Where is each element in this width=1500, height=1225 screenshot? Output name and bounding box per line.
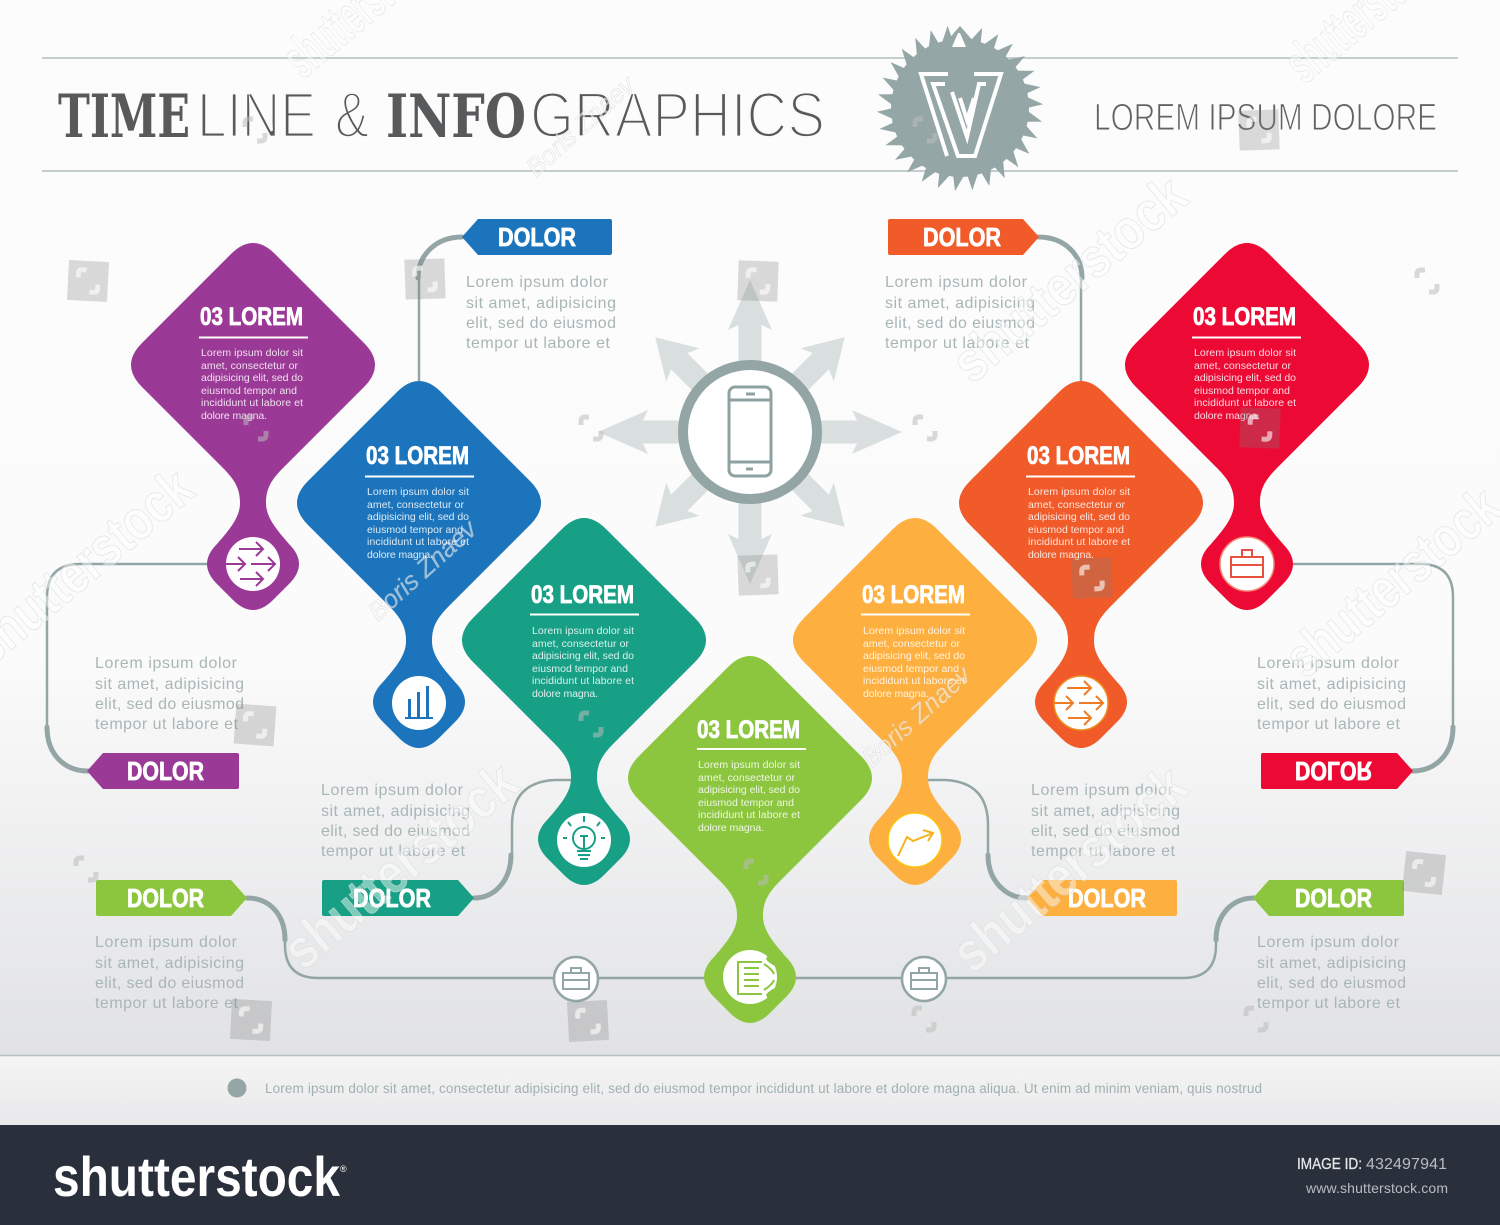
panel: yellow step: dolore magna. — [863, 688, 929, 700]
text block: lower left: sit amet, adipisicing — [321, 803, 470, 820]
panel: red step: adipisicing elit, sed do — [1194, 372, 1296, 384]
tag: purple dolor: DOLOR — [127, 756, 204, 786]
watermark layer: shutterstock — [270, 749, 530, 981]
tag: lime dolor right: DOLOR — [1295, 883, 1372, 913]
icon: arrows — [1054, 676, 1108, 730]
text block: middle left: elit, sed do eiusmod — [95, 696, 244, 713]
connector: teal pin to tag — [474, 780, 575, 898]
panel: orange step: adipisicing elit, sed do — [1028, 511, 1130, 523]
text block: middle left: sit amet, adipisicing — [95, 676, 244, 693]
footnote bullet — [228, 1078, 246, 1098]
text block: bottom left: tempor ut labore et — [95, 995, 239, 1012]
text block: top left — [466, 274, 616, 352]
text block: top right — [885, 274, 1035, 352]
connector: purple pin to tag — [47, 564, 207, 771]
text block: lower right: Lorem ipsum dolor — [1031, 782, 1174, 799]
panel: blue step — [297, 381, 541, 748]
header rule top — [42, 57, 1458, 59]
panel: yellow step: Lorem ipsum dolor sit — [863, 625, 965, 637]
panel: purple step: incididunt ut labore et — [201, 397, 303, 409]
image number: 432497941 — [1366, 1156, 1447, 1173]
title: LINE — [197, 79, 316, 151]
text block: middle right: sit amet, adipisicing — [1257, 676, 1406, 693]
text block: middle left: tempor ut labore et — [95, 716, 239, 733]
panel: purple step: adipisicing elit, sed do — [201, 372, 303, 384]
panel: purple step: Lorem ipsum dolor sit — [201, 347, 303, 359]
text block: middle left — [95, 655, 244, 733]
text block: bottom right: Lorem ipsum dolor — [1257, 934, 1400, 951]
panel: teal step: Lorem ipsum dolor sit — [532, 625, 634, 637]
text block: bottom left: elit, sed do eiusmod — [95, 975, 244, 992]
panel: green step — [628, 656, 872, 1023]
text block: bottom right: sit amet, adipisicing — [1257, 955, 1406, 972]
panel: blue step: amet, consectetur or — [367, 499, 464, 511]
tag: teal dolor: DOLOR — [353, 883, 431, 913]
text block: lower left: tempor ut labore et — [321, 843, 466, 860]
logo badge — [877, 25, 1043, 191]
icon: document — [723, 950, 778, 1004]
stock logo: shutterstock — [53, 1145, 341, 1208]
panel: yellow step: 03 LOREM — [862, 581, 965, 609]
connector: red pin to tag — [1293, 564, 1453, 771]
text block: bottom left: Lorem ipsum dolor — [95, 934, 238, 951]
title: INFO — [386, 82, 526, 152]
connector: orange tag to pin — [1038, 237, 1082, 381]
icon: arrows — [226, 537, 280, 591]
panel: blue step: adipisicing elit, sed do — [367, 511, 469, 523]
panel: blue step: Lorem ipsum dolor sit — [367, 486, 469, 498]
title: & — [335, 79, 369, 151]
panel: orange step: 03 LOREM — [1027, 442, 1130, 470]
icon: smartphone — [729, 387, 771, 476]
text block: top right: tempor ut labore et — [885, 335, 1030, 352]
text block: middle right: Lorem ipsum dolor — [1257, 655, 1400, 672]
panel: green step: dolore magna. — [698, 822, 764, 834]
panel: blue step: dolore magna. — [367, 549, 433, 561]
panel: blue step: 03 LOREM — [366, 442, 469, 470]
panel: orange step: eiusmod tempor and — [1028, 524, 1124, 536]
icon: light bulb — [557, 813, 611, 867]
panel: purple step: 03 LOREM — [200, 303, 303, 331]
text block: lower right: sit amet, adipisicing — [1031, 803, 1180, 820]
panel: purple step: dolore magna. — [201, 410, 267, 422]
panel: teal step: adipisicing elit, sed do — [532, 650, 634, 662]
text block: top right: elit, sed do eiusmod — [885, 315, 1035, 332]
tag: lime dolor left — [96, 880, 247, 916]
icon: briefcase — [1220, 537, 1274, 591]
panel: blue step: eiusmod tempor and — [367, 524, 463, 536]
panel: teal step: eiusmod tempor and — [532, 663, 628, 675]
connector: yellow pin to tag — [925, 780, 1027, 898]
header rule bottom — [42, 170, 1458, 172]
tag: lime dolor left: DOLOR — [127, 883, 204, 913]
stock logo: ® — [340, 1164, 347, 1174]
tag: yellow dolor — [1027, 880, 1177, 916]
text block: top left: sit amet, adipisicing — [466, 295, 616, 312]
text block: bottom right: tempor ut labore et — [1257, 995, 1401, 1012]
panel: green step: adipisicing elit, sed do — [698, 784, 800, 796]
tag: orange dolor — [888, 219, 1039, 255]
tag: red dolor, flipped: DOLOR — [1295, 756, 1372, 786]
panel: teal step: incididunt ut labore et — [532, 675, 634, 687]
panel: purple step: amet, consectetur or — [201, 360, 298, 372]
central hub circle — [683, 365, 817, 499]
panel: teal step: amet, consectetur or — [532, 638, 630, 650]
text block: bottom right — [1257, 934, 1406, 1012]
watermark layer: shutterstock — [939, 752, 1199, 984]
tag: teal dolor — [322, 880, 474, 916]
panel: red step: amet, consectetur or — [1194, 360, 1292, 372]
tag: red dolor, flipped — [1261, 753, 1413, 789]
panel: teal step: dolore magna. — [532, 688, 598, 700]
panel: yellow step: adipisicing elit, sed do — [863, 650, 965, 662]
text block: middle right — [1257, 655, 1406, 733]
panel: green step: eiusmod tempor and — [698, 797, 794, 809]
panel: green step: amet, consectetur or — [698, 772, 796, 784]
text block: bottom left — [95, 934, 244, 1012]
tag: lime dolor right — [1253, 880, 1404, 916]
panel: purple step: eiusmod tempor and — [201, 385, 297, 397]
text block: lower right — [1031, 782, 1180, 860]
tag: blue dolor: DOLOR — [498, 222, 576, 252]
connector: bottom baseline left — [247, 898, 710, 978]
text block: lower left — [321, 782, 470, 860]
panel: teal step — [462, 518, 706, 885]
panel: green step: incididunt ut labore et — [698, 809, 800, 821]
panel: green step: Lorem ipsum dolor sit — [698, 759, 800, 771]
text block: lower left: elit, sed do eiusmod — [321, 823, 470, 840]
watermark layer: Boris Znaev — [362, 513, 484, 626]
panel: green step: 03 LOREM — [697, 716, 800, 744]
tag: blue dolor — [462, 219, 612, 255]
title: TIME — [58, 82, 190, 152]
text block: top left: Lorem ipsum dolor — [466, 274, 609, 291]
title — [58, 79, 825, 152]
text block: lower left: Lorem ipsum dolor — [321, 782, 464, 799]
text block: bottom left: sit amet, adipisicing — [95, 955, 244, 972]
panel: yellow step: amet, consectetur or — [863, 638, 960, 650]
panel: yellow step — [793, 518, 1037, 885]
text block: middle left: Lorem ipsum dolor — [95, 655, 238, 672]
node: briefcase left — [554, 957, 598, 1001]
panel: orange step: dolore magna. — [1028, 549, 1094, 561]
connector: bottom baseline right — [790, 898, 1254, 978]
connector: blue tag to pin — [418, 237, 462, 381]
tag: purple dolor — [87, 753, 239, 789]
panel: orange step: Lorem ipsum dolor sit — [1028, 486, 1130, 498]
central hub arrows — [598, 280, 902, 584]
panel: red step: dolore magna. — [1194, 410, 1260, 422]
text block: lower right: elit, sed do eiusmod — [1031, 823, 1180, 840]
watermark layer: Boris Znaev — [856, 659, 978, 772]
panel: yellow step: incididunt ut labore et — [863, 675, 965, 687]
panel: teal step: 03 LOREM — [531, 581, 634, 609]
text block: top right: Lorem ipsum dolor — [885, 274, 1028, 291]
stock footer bar — [0, 1125, 1500, 1225]
image id: IMAGE ID: — [1297, 1156, 1362, 1173]
tag: yellow dolor: DOLOR — [1068, 883, 1146, 913]
panel: red step — [1125, 243, 1369, 610]
site url: www.shutterstock.com — [1305, 1180, 1448, 1196]
panel: red step: Lorem ipsum dolor sit — [1194, 347, 1296, 359]
text block: middle right: tempor ut labore et — [1257, 716, 1401, 733]
watermark layer: Boris Znaev — [520, 69, 642, 182]
panel: red step: incididunt ut labore et — [1194, 397, 1296, 409]
icon: growth line — [888, 813, 942, 867]
panel: orange step — [959, 381, 1203, 748]
text block: bottom right: elit, sed do eiusmod — [1257, 975, 1406, 992]
text block: top left: tempor ut labore et — [466, 335, 611, 352]
text block: middle right: elit, sed do eiusmod — [1257, 696, 1406, 713]
panel: blue step: incididunt ut labore et — [367, 536, 469, 548]
icon: bar chart — [392, 676, 446, 730]
text block: lower right: tempor ut labore et — [1031, 843, 1176, 860]
panel: orange step: incididunt ut labore et — [1028, 536, 1130, 548]
text block: top left: elit, sed do eiusmod — [466, 315, 616, 332]
panel: orange step: amet, consectetur or — [1028, 499, 1126, 511]
panel: red step: eiusmod tempor and — [1194, 385, 1290, 397]
panel: yellow step: eiusmod tempor and — [863, 663, 959, 675]
footnote band — [0, 1055, 1500, 1125]
tag: orange dolor: DOLOR — [923, 222, 1001, 252]
title: GRAPHICS — [530, 79, 825, 151]
panel: red step: 03 LOREM — [1193, 303, 1296, 331]
text block: top right: sit amet, adipisicing — [885, 295, 1035, 312]
footnote text: Lorem ipsum dolor sit amet, consectetur adipisicing elit, sed do eiusmod tempor incididunt ut labore et dolore magna aliqua. Ut enim ad minim veniam, quis nostrud — [265, 1081, 1262, 1096]
panel: purple step — [131, 243, 375, 610]
watermark layer: shutterstock — [939, 162, 1199, 394]
node: briefcase right — [902, 957, 946, 1001]
